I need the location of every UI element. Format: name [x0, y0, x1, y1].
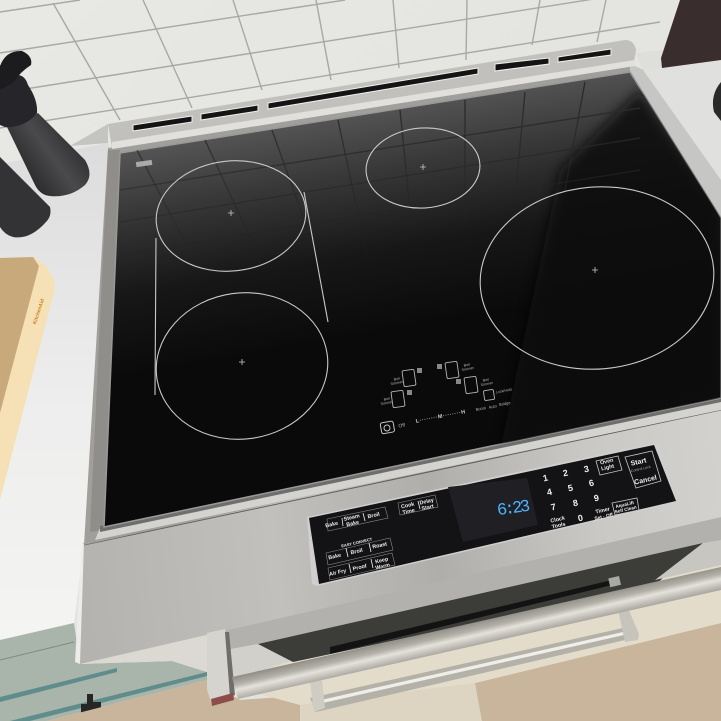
oven display [448, 478, 538, 542]
zone labels: Boil [463, 362, 470, 368]
oven mode buttons: Bake [346, 520, 360, 528]
reflected tile lines [120, 82, 640, 215]
power button [380, 421, 395, 434]
oven door [80, 517, 721, 705]
power scale: Off [398, 422, 406, 430]
oven mode buttons: Warm [375, 562, 391, 572]
cutting board [0, 257, 55, 500]
rear vent guard [108, 40, 636, 149]
spray bottle [0, 51, 90, 196]
power scale: L········M········H [415, 409, 466, 425]
function keys: Control Lock [630, 465, 651, 473]
oven mode buttons: Air Fry [329, 568, 347, 578]
oven mode buttons: Roast [372, 541, 388, 551]
zone labels [380, 362, 494, 406]
number keypad: 4 [546, 487, 553, 498]
zone labels: Simmer [390, 380, 404, 386]
zone labels: Simmer [380, 400, 394, 406]
oven mode buttons: Bake [328, 553, 342, 561]
function keys: AquaLift [615, 500, 635, 509]
zone labels: Boil [383, 396, 390, 402]
oven mode buttons: Broil [367, 512, 381, 520]
oven mode buttons: Bake [325, 521, 339, 529]
cabinet leg [81, 694, 101, 714]
lower door bar [310, 608, 639, 712]
brand mark on board: KitchenAid [32, 298, 46, 325]
power scale: Lock/Hold [496, 388, 512, 395]
burner markings [147, 124, 721, 450]
oven mode buttons: Broil [350, 548, 364, 556]
model label [136, 160, 152, 167]
number keypad: 8 [572, 498, 579, 509]
number keypad: 2 [562, 468, 569, 479]
number keypad [542, 464, 600, 524]
function keys: Light [601, 464, 615, 472]
second bottle [0, 157, 50, 237]
floor [47, 623, 721, 721]
bridge outline [155, 192, 328, 395]
function keys: Oven [600, 458, 614, 466]
lower cabinet [0, 623, 207, 721]
power scale: Auto [488, 403, 498, 410]
right countertop [635, 0, 721, 180]
burner: right large [473, 177, 721, 379]
function keys: Self Clean [614, 505, 637, 514]
oven mode buttons: Proof [352, 563, 368, 573]
zone labels: Simmer [480, 381, 494, 387]
function keys: Timer [595, 506, 611, 516]
oven mode buttons: Keep [375, 556, 390, 565]
cooktop touch controls [380, 361, 512, 434]
function keys: Set · Off [594, 512, 614, 522]
function keys: Tools [551, 522, 566, 531]
zone labels: Boil [482, 377, 489, 383]
oven mode buttons: Cook [401, 502, 415, 510]
zone labels: Simmer [461, 366, 475, 372]
cooktop steel frame [84, 64, 721, 545]
power scale [398, 388, 512, 430]
control panel [307, 443, 678, 586]
oven mode buttons: Delay [419, 497, 434, 507]
number keypad: 0 [577, 513, 584, 524]
number keypad: 9 [593, 493, 600, 504]
vent slots [133, 49, 611, 131]
function keys [550, 451, 661, 531]
oven mode buttons [325, 495, 438, 580]
power scale: Boost [475, 405, 487, 412]
function keys: Clock [550, 515, 566, 525]
number keypad: 7 [550, 502, 557, 513]
number keypad: 5 [567, 483, 574, 494]
burner: rear small [363, 124, 483, 212]
door window [258, 543, 703, 662]
number keypad: 3 [583, 464, 590, 475]
burner: front left [147, 282, 337, 450]
dark right reflection [500, 90, 721, 450]
left countertop [0, 143, 110, 640]
dark box [661, 0, 721, 68]
oven mode buttons: Start [421, 504, 435, 512]
zone labels: Boil [393, 376, 400, 382]
function keys: Cancel [634, 475, 658, 487]
power scale: Bridge [499, 400, 512, 407]
dark jar [713, 82, 721, 121]
burner: rear left [151, 153, 311, 279]
number keypad: 1 [542, 473, 549, 484]
number keypad: 6 [588, 478, 595, 489]
oven mode buttons: EASY CONVECT [341, 536, 373, 549]
oven mode buttons: Steam [343, 513, 361, 523]
steel front fascia [75, 405, 721, 664]
oven mode buttons: Time [402, 508, 416, 516]
glass cooktop [104, 72, 721, 527]
oven display: 6:23 [496, 498, 531, 521]
function keys: Start [630, 457, 648, 468]
oven handle brackets and bar [207, 567, 721, 706]
